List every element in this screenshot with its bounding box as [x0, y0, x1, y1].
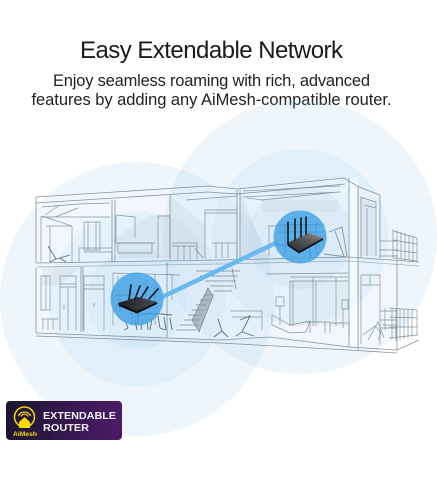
staircase [176, 268, 240, 332]
lower floor rooms [41, 273, 396, 340]
left router bubble [110, 272, 164, 326]
title: Easy Extendable Network [80, 37, 344, 64]
subtitle: features by adding any AiMesh-compatible router. [32, 91, 392, 109]
badge: extendable router [6, 401, 122, 440]
building wall shading [36, 178, 397, 350]
icon: AiMesh: AiMesh [13, 432, 37, 438]
right router bubble [274, 210, 326, 264]
wifi coverage: left router [0, 162, 274, 436]
badge text: ROUTER [43, 423, 90, 434]
badge text: EXTENDABLE [43, 411, 116, 422]
wifi link between routers [160, 242, 278, 298]
bubble interior lines [115, 224, 325, 325]
icon: left router [118, 285, 158, 314]
treadmill [324, 227, 347, 257]
icon: right router [287, 217, 323, 254]
wifi coverage: right router [163, 100, 437, 374]
badge text [43, 411, 116, 434]
subtitle [32, 72, 392, 109]
outdoor chairs and dining set [48, 246, 254, 337]
building line drawing [36, 178, 419, 353]
balcony railings [361, 229, 417, 345]
upper floor rooms [41, 186, 398, 262]
building shell [36, 178, 419, 353]
subtitle: Enjoy seamless roaming with rich, advanced [53, 72, 370, 90]
